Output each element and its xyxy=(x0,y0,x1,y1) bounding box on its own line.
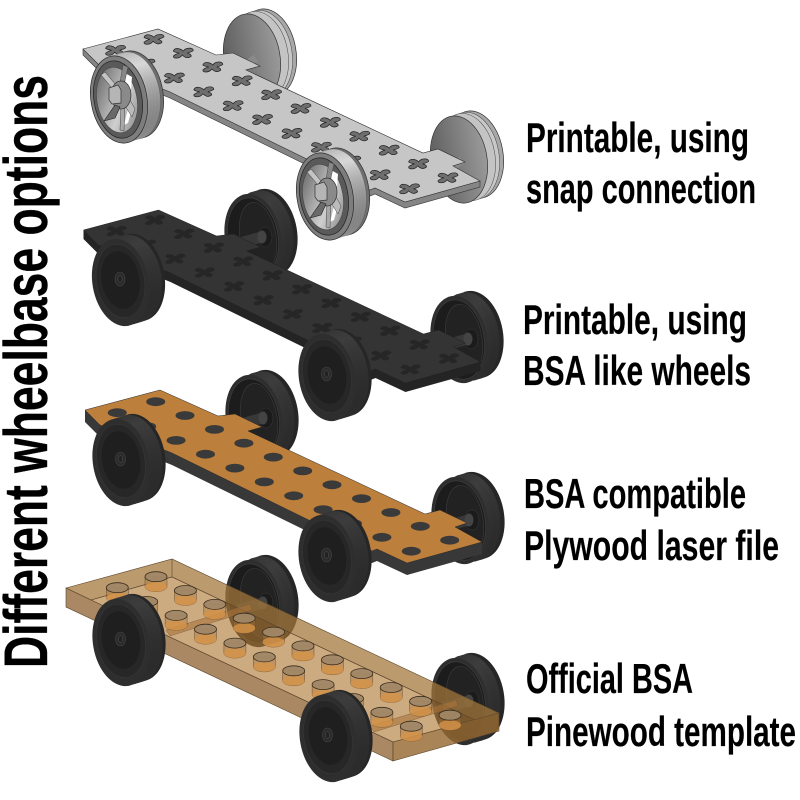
cross marks xyxy=(107,215,459,374)
translucent block xyxy=(66,559,499,761)
plywood holes xyxy=(108,397,459,556)
label: printable BSA like wheels xyxy=(523,296,751,394)
front wheels xyxy=(86,589,379,787)
car: plywood laser file xyxy=(85,365,511,607)
car: official BSA pinewood template xyxy=(66,550,511,787)
rear wheels xyxy=(218,184,510,388)
car: grey snap-connection printable xyxy=(83,4,510,245)
label: official pinewood template: Official BSA xyxy=(526,655,693,702)
label: printable snap connection xyxy=(526,114,756,212)
deck plate xyxy=(84,210,480,392)
axle channels xyxy=(166,604,458,732)
deck plate xyxy=(83,29,480,208)
rear wheels xyxy=(219,365,511,569)
rear wheels xyxy=(219,550,511,750)
snap holes xyxy=(106,34,458,194)
front wheels xyxy=(84,46,376,245)
studs xyxy=(106,572,461,741)
label: official pinewood template xyxy=(526,655,796,755)
front wheels xyxy=(85,229,378,426)
label: plywood laser file xyxy=(524,470,779,569)
front wheels xyxy=(86,409,378,607)
car: black printable with BSA-like wheels xyxy=(84,184,510,426)
deck plate xyxy=(85,390,482,575)
rear wheels xyxy=(217,4,510,208)
